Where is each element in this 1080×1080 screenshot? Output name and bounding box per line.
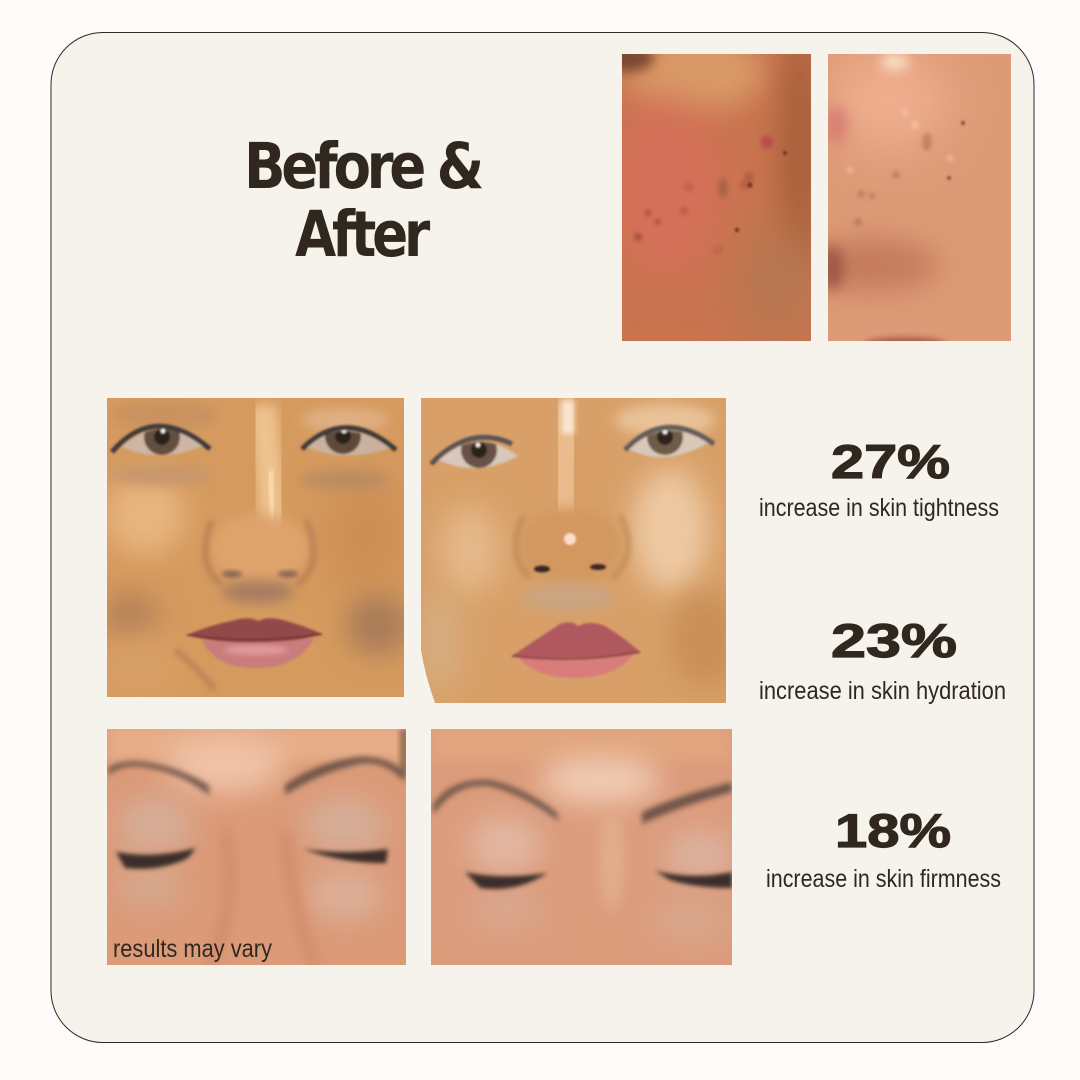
title: Before & [244,130,483,203]
stat: 27% tightness: 27% [831,435,950,488]
photo: eyes after [431,725,734,965]
stat: 18% firmness: increase in skin firmness [766,865,1001,893]
title [244,130,483,271]
photo: cheek before [622,54,811,341]
stat: 23% hydration [759,614,1006,705]
photo: face after [420,398,741,703]
stat: 18% firmness [766,804,1001,893]
stat: 27% tightness [759,435,999,522]
stat: 23% hydration: 23% [831,614,957,667]
stat: 23% hydration: increase in skin hydration [759,677,1006,705]
photo: face before [100,398,410,700]
title: After [295,198,430,271]
photo: cheek after [828,54,1011,341]
stat: 18% firmness: 18% [835,804,951,857]
stat: 27% tightness: increase in skin tightness [759,494,999,522]
text: results may vary: results may vary [113,935,272,963]
photo: eyes before [107,725,408,965]
